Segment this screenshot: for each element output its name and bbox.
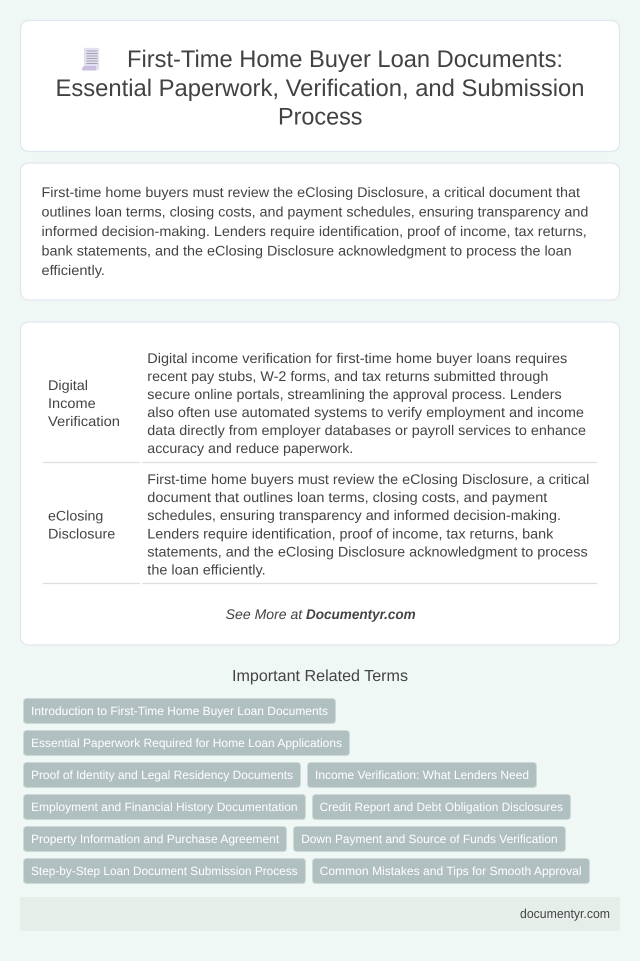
row text: Digital Income Verification: accuracy and reduce paperwork. (147, 440, 353, 456)
heading: Important Related Terms: Important Related Terms (232, 668, 408, 685)
tag: property information: Property Information and Purchase Agreement (31, 832, 280, 846)
tag: income verification: Income Verification: What Lenders Need (315, 768, 529, 782)
row text: Digital Income Verification (147, 350, 586, 456)
intro paragraph (42, 184, 588, 278)
tag: proof of identity (24, 762, 300, 788)
panel: title card (20, 20, 620, 152)
row text: Digital Income Verification: Digital income verification for first-time home buyer loans requires (147, 350, 567, 366)
row text: Digital Income Verification: data directly from employer databases or payroll services to enhance (147, 422, 586, 438)
row label: Digital Income Verification (48, 377, 120, 429)
row label: Digital Income Verification: Income (48, 395, 96, 411)
tag: essential paperwork: Essential Paperwork Required for Home Loan Applications (31, 736, 342, 750)
see more link (226, 606, 416, 622)
tag: submission process (24, 858, 306, 884)
related terms tags (24, 698, 590, 884)
see more link: See More at (226, 606, 303, 622)
tag: proof of identity: Proof of Identity and Legal Residency Documents (31, 768, 293, 782)
row text: eClosing Disclosure: schedules, ensuring transparency and informed decision-making. (147, 507, 561, 523)
row label: Digital Income Verification: Digital (48, 377, 88, 393)
row text: eClosing Disclosure: First-time home buyers must review the eClosing Disclosure, a critical (147, 471, 589, 487)
tag: credit report (312, 794, 570, 820)
row label: eClosing Disclosure: eClosing (48, 508, 103, 524)
tag: down payment: Down Payment and Source of Funds Verification (301, 832, 558, 846)
tag: property information (24, 826, 286, 852)
tag: employment history: Employment and Financial History Documentation (31, 800, 298, 814)
intro paragraph: bank statements, and the eClosing Disclosure acknowledgment to process the loan (42, 242, 572, 258)
tag: common mistakes (312, 858, 590, 884)
row text: eClosing Disclosure: statements, and the eClosing Disclosure acknowledgment to process (147, 544, 588, 560)
row text: eClosing Disclosure (147, 471, 589, 578)
intro paragraph: informed decision-making. Lenders require identification, proof of income, tax returns, (42, 223, 587, 239)
tag: down payment (294, 826, 566, 852)
tag: essential paperwork (24, 730, 350, 756)
tag: common mistakes: Common Mistakes and Tips for Smooth Approval (320, 864, 582, 878)
row text: eClosing Disclosure: Lenders require identification, proof of income, tax returns, bank (147, 525, 554, 541)
row text: Digital Income Verification: recent pay stubs, W-2 forms, and tax returns submitted through (147, 368, 548, 384)
tag: introduction: Introduction to First-Time Home Buyer Loan Documents (31, 704, 328, 718)
row label: eClosing Disclosure: Disclosure (48, 526, 116, 542)
tag: income verification (308, 762, 536, 788)
see more link: Documentyr.com (306, 606, 416, 622)
row label: eClosing Disclosure (48, 508, 116, 542)
tag: introduction (24, 698, 336, 724)
title text: Process (278, 104, 362, 130)
panel: document table (20, 322, 620, 645)
row label: Digital Income Verification: Verification (48, 413, 120, 429)
tag: credit report: Credit Report and Debt Obligation Disclosures (320, 800, 563, 814)
footer bar: documentyr.com (520, 906, 610, 921)
title text (56, 46, 584, 130)
tag: employment history (24, 794, 306, 820)
intro paragraph: efficiently. (42, 262, 105, 278)
icon: paper scroll (82, 48, 99, 70)
intro paragraph: First-time home buyers must review the eClosing Disclosure, a critical document that (42, 184, 580, 200)
title text: Essential Paperwork, Verification, and Submission (56, 75, 584, 102)
intro paragraph: outlines loan terms, closing costs, and payment schedules, ensuring transparency and (42, 204, 588, 220)
row text: eClosing Disclosure: the loan efficiently. (147, 562, 266, 578)
panel: intro summary (20, 163, 620, 300)
footer bar (20, 897, 620, 931)
row text: eClosing Disclosure: document that outlines loan terms, closing costs, and payment (147, 489, 547, 505)
title text: First-Time Home Buyer Loan Documents: (127, 46, 563, 73)
row text: Digital Income Verification: also often use automated systems to verify employment and income (147, 404, 584, 420)
tag: submission process: Step-by-Step Loan Document Submission Process (31, 864, 298, 878)
row text: Digital Income Verification: secure online portals, streamlining the approval process. Lenders (147, 386, 562, 402)
